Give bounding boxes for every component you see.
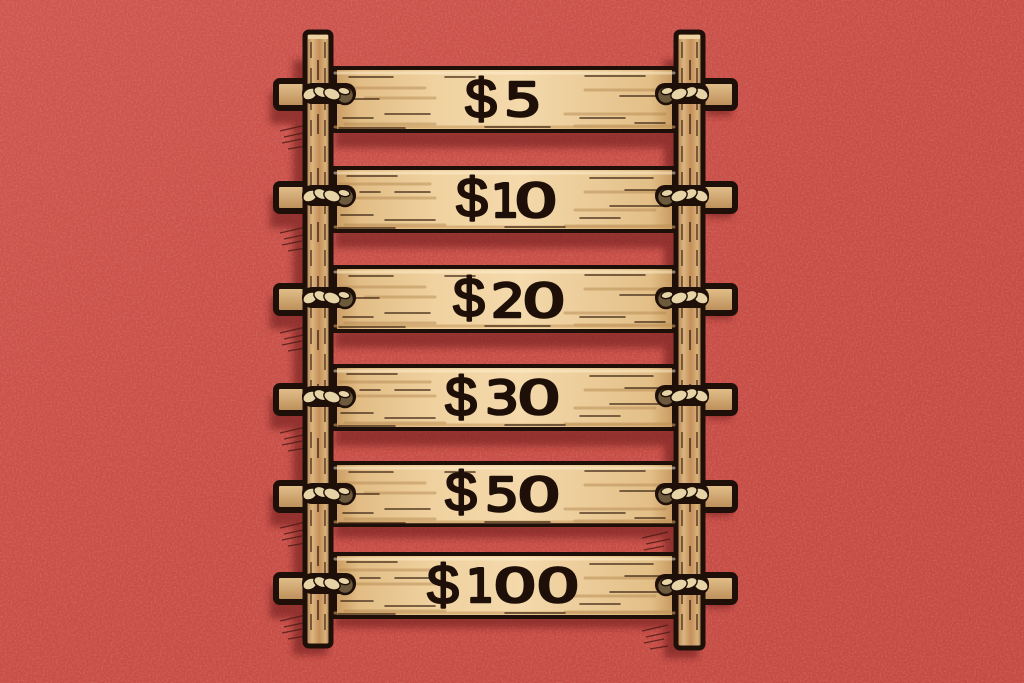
price label: $50: 0 bbox=[517, 468, 561, 522]
right ladder pole bbox=[676, 32, 703, 648]
price label: $20: $ bbox=[453, 266, 485, 329]
price label: $20: 0 bbox=[522, 274, 566, 328]
right rung stubs bbox=[700, 81, 735, 602]
plank: $10 bbox=[335, 166, 674, 232]
price label: $100: 1 bbox=[466, 559, 494, 613]
price label: $30: 3 bbox=[485, 371, 519, 425]
price label: $5: $ bbox=[465, 67, 497, 130]
left rung stubs bbox=[276, 81, 310, 602]
price label: $30: $ bbox=[445, 365, 477, 428]
price label: $100: 0 bbox=[493, 559, 537, 613]
price label: $100: 0 bbox=[536, 559, 580, 613]
ladder drop shadows bbox=[270, 60, 732, 658]
plank: $30 bbox=[335, 365, 674, 430]
price label: $20: 2 bbox=[491, 274, 525, 328]
price label: $50: $ bbox=[445, 460, 477, 523]
plank: $20 bbox=[335, 266, 674, 332]
price label: $100: $ bbox=[427, 553, 459, 616]
price label: $5: 5 bbox=[504, 73, 542, 127]
plank: $50 bbox=[335, 460, 674, 526]
plank: $5 bbox=[335, 67, 674, 132]
price label: $50: 5 bbox=[485, 468, 519, 522]
rough hatch marks beside the poles bbox=[280, 125, 670, 649]
price label: $10: 1 bbox=[491, 174, 519, 228]
plank: $100 bbox=[335, 553, 674, 618]
right rope lashings bbox=[655, 83, 710, 595]
left ladder pole bbox=[305, 32, 331, 646]
price label: $10: 0 bbox=[514, 174, 558, 228]
left rope lashings bbox=[301, 83, 356, 594]
price label: $30: 0 bbox=[517, 371, 561, 425]
price label: $10: $ bbox=[456, 166, 488, 229]
